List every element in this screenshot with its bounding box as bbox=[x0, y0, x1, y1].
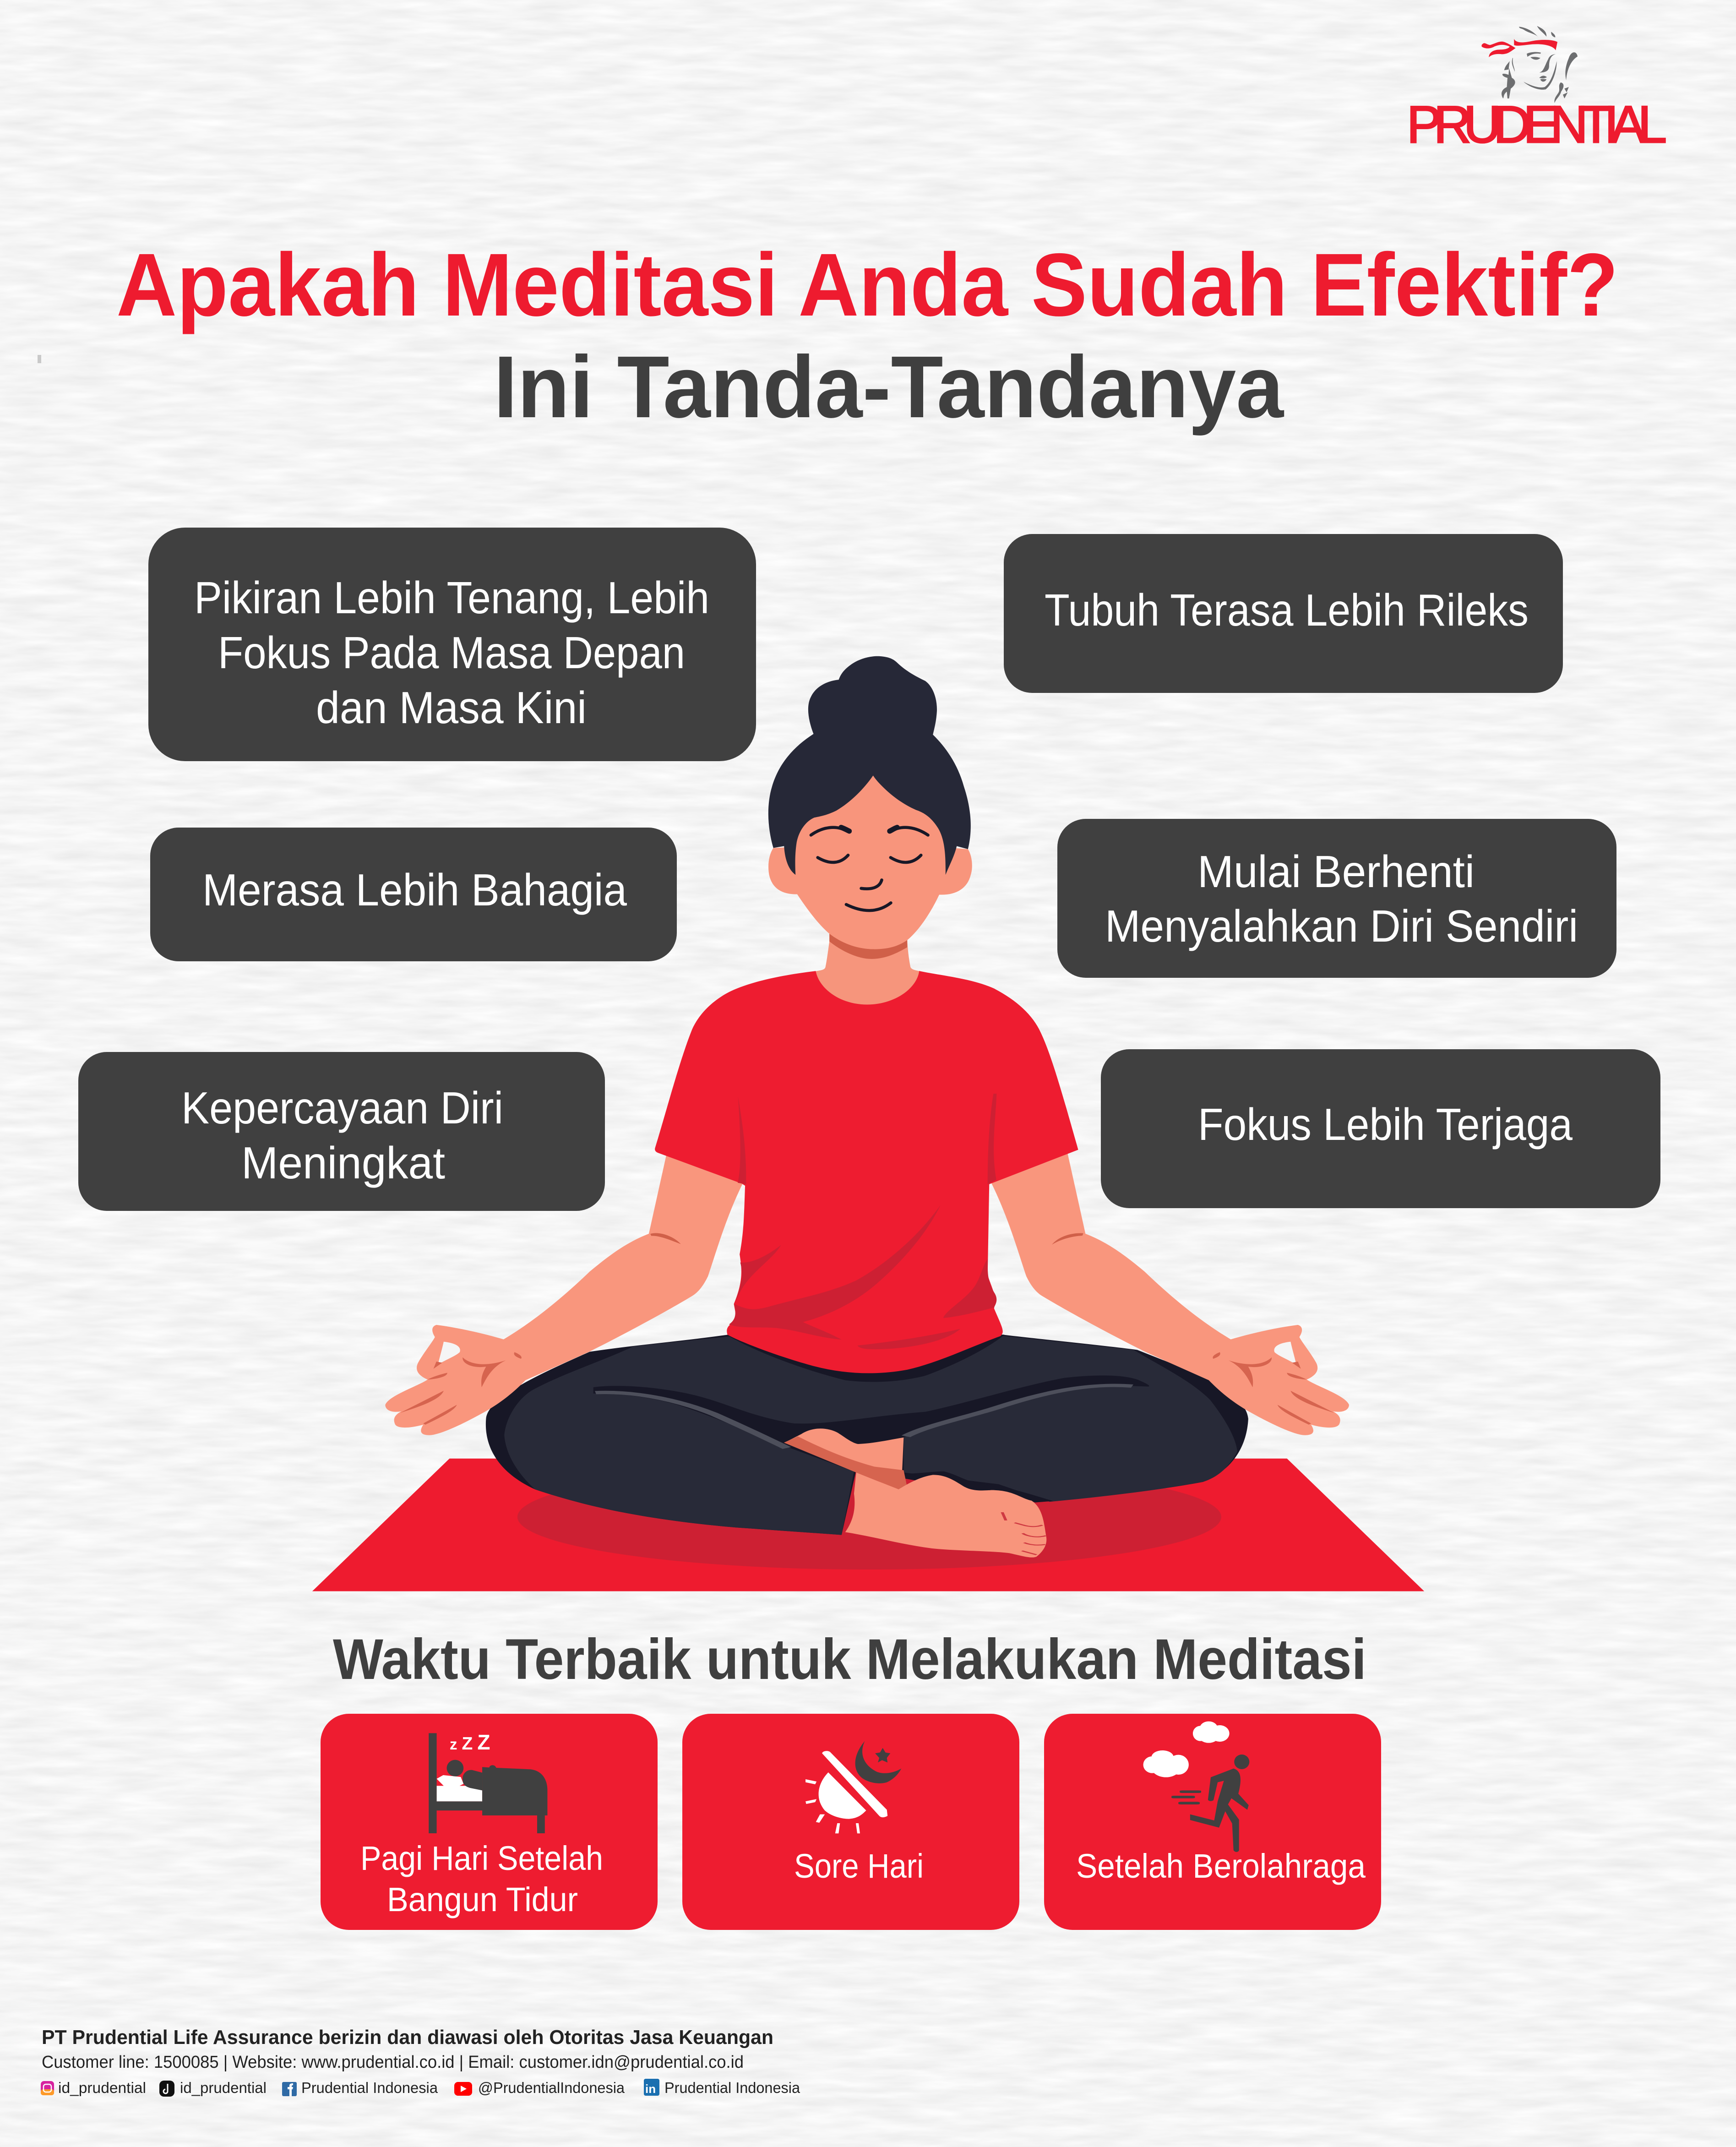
left arm bbox=[385, 1139, 751, 1435]
title line 2: Ini Tanda-Tandanya bbox=[494, 338, 1284, 436]
panel: kepercayaan diri meningkat bbox=[78, 1052, 605, 1211]
icon: facebook bbox=[282, 2082, 297, 2096]
social label: Prudential Indonesia bbox=[664, 2079, 800, 2096]
logo wordmark: PRUDENTIAL bbox=[1407, 96, 1667, 154]
card text: Sore Hari bbox=[794, 1847, 924, 1885]
panel text: Kepercayaan Diri bbox=[181, 1083, 503, 1133]
card: sore hari bbox=[682, 1714, 1019, 1930]
icon: runner with clouds bbox=[1143, 1722, 1249, 1852]
panel text bbox=[194, 572, 709, 733]
icon: sleeping person in bed bbox=[429, 1730, 547, 1833]
panel text: Meningkat bbox=[241, 1138, 445, 1188]
footer bbox=[41, 2026, 800, 2097]
panel text bbox=[181, 1083, 503, 1188]
social label: id_prudential bbox=[180, 2079, 267, 2096]
panel: merasa lebih bahagia bbox=[150, 828, 677, 961]
logo emblem bbox=[1482, 26, 1578, 103]
panel text: dan Masa Kini bbox=[316, 682, 587, 733]
back foot bbox=[784, 1428, 907, 1489]
logo: Prudential bbox=[1407, 26, 1667, 154]
shirt bbox=[650, 971, 1083, 1373]
social label: @PrudentialIndonesia bbox=[478, 2079, 625, 2096]
front foot bbox=[845, 1472, 1046, 1558]
social label: Prudential Indonesia bbox=[301, 2079, 438, 2096]
title bbox=[116, 235, 1618, 436]
icon: instagram bbox=[41, 2081, 54, 2095]
card text: Pagi Hari Setelah bbox=[360, 1839, 603, 1877]
title line 1: Apakah Meditasi Anda Sudah Efektif? bbox=[116, 235, 1618, 335]
panel text: Tubuh Terasa Lebih Rileks bbox=[1045, 585, 1529, 635]
neck bbox=[811, 933, 925, 1015]
hair bbox=[768, 656, 971, 875]
panel: tubuh terasa lebih rileks bbox=[1004, 534, 1563, 693]
panel text: Pikiran Lebih Tenang, Lebih bbox=[194, 572, 709, 623]
panel text: Merasa Lebih Bahagia bbox=[202, 865, 627, 915]
panel: fokus lebih terjaga bbox=[1101, 1049, 1660, 1208]
footer contact line: Customer line: 1500085 | Website: www.prudential.co.id | Email: customer.idn@prudential.co.id bbox=[42, 2053, 744, 2072]
yoga mat bbox=[312, 1459, 1424, 1591]
panel text: Menyalahkan Diri Sendiri bbox=[1105, 901, 1578, 951]
panel text: Mulai Berhenti bbox=[1197, 846, 1475, 897]
social label: id_prudential bbox=[58, 2079, 146, 2096]
footer legal line: PT Prudential Life Assurance berizin dan diawasi oleh Otoritas Jasa Keuangan bbox=[42, 2026, 773, 2049]
head bbox=[768, 656, 972, 959]
illustration: meditating woman on mat bbox=[312, 656, 1424, 1591]
card: setelah berolahraga bbox=[1044, 1714, 1381, 1930]
card text: Setelah Berolahraga bbox=[1076, 1847, 1366, 1885]
panel: mulai berhenti menyalahkan diri bbox=[1057, 819, 1616, 978]
right arm bbox=[984, 1139, 1349, 1435]
icon: sleeping person in bed: z ZZ bbox=[450, 1730, 490, 1754]
panel text bbox=[1105, 846, 1578, 951]
panel text: Fokus Pada Masa Depan bbox=[218, 627, 685, 678]
icon: sun and moon bbox=[805, 1741, 901, 1833]
icon: linkedin bbox=[644, 2079, 659, 2096]
legs bbox=[486, 1335, 1248, 1535]
icon: youtube bbox=[454, 2082, 472, 2096]
panel: pikiran lebih tenang bbox=[148, 528, 756, 761]
icon: linkedin: in bbox=[645, 2082, 656, 2096]
card: pagi hari setelah bangun tidur bbox=[321, 1714, 658, 1930]
card text bbox=[360, 1839, 603, 1918]
face features bbox=[811, 828, 928, 910]
panel text: Fokus Lebih Terjaga bbox=[1198, 1099, 1573, 1150]
section heading: Waktu Terbaik untuk Melakukan Meditasi bbox=[333, 1628, 1366, 1691]
icon: tiktok bbox=[159, 2081, 174, 2097]
card text: Bangun Tidur bbox=[387, 1880, 578, 1918]
